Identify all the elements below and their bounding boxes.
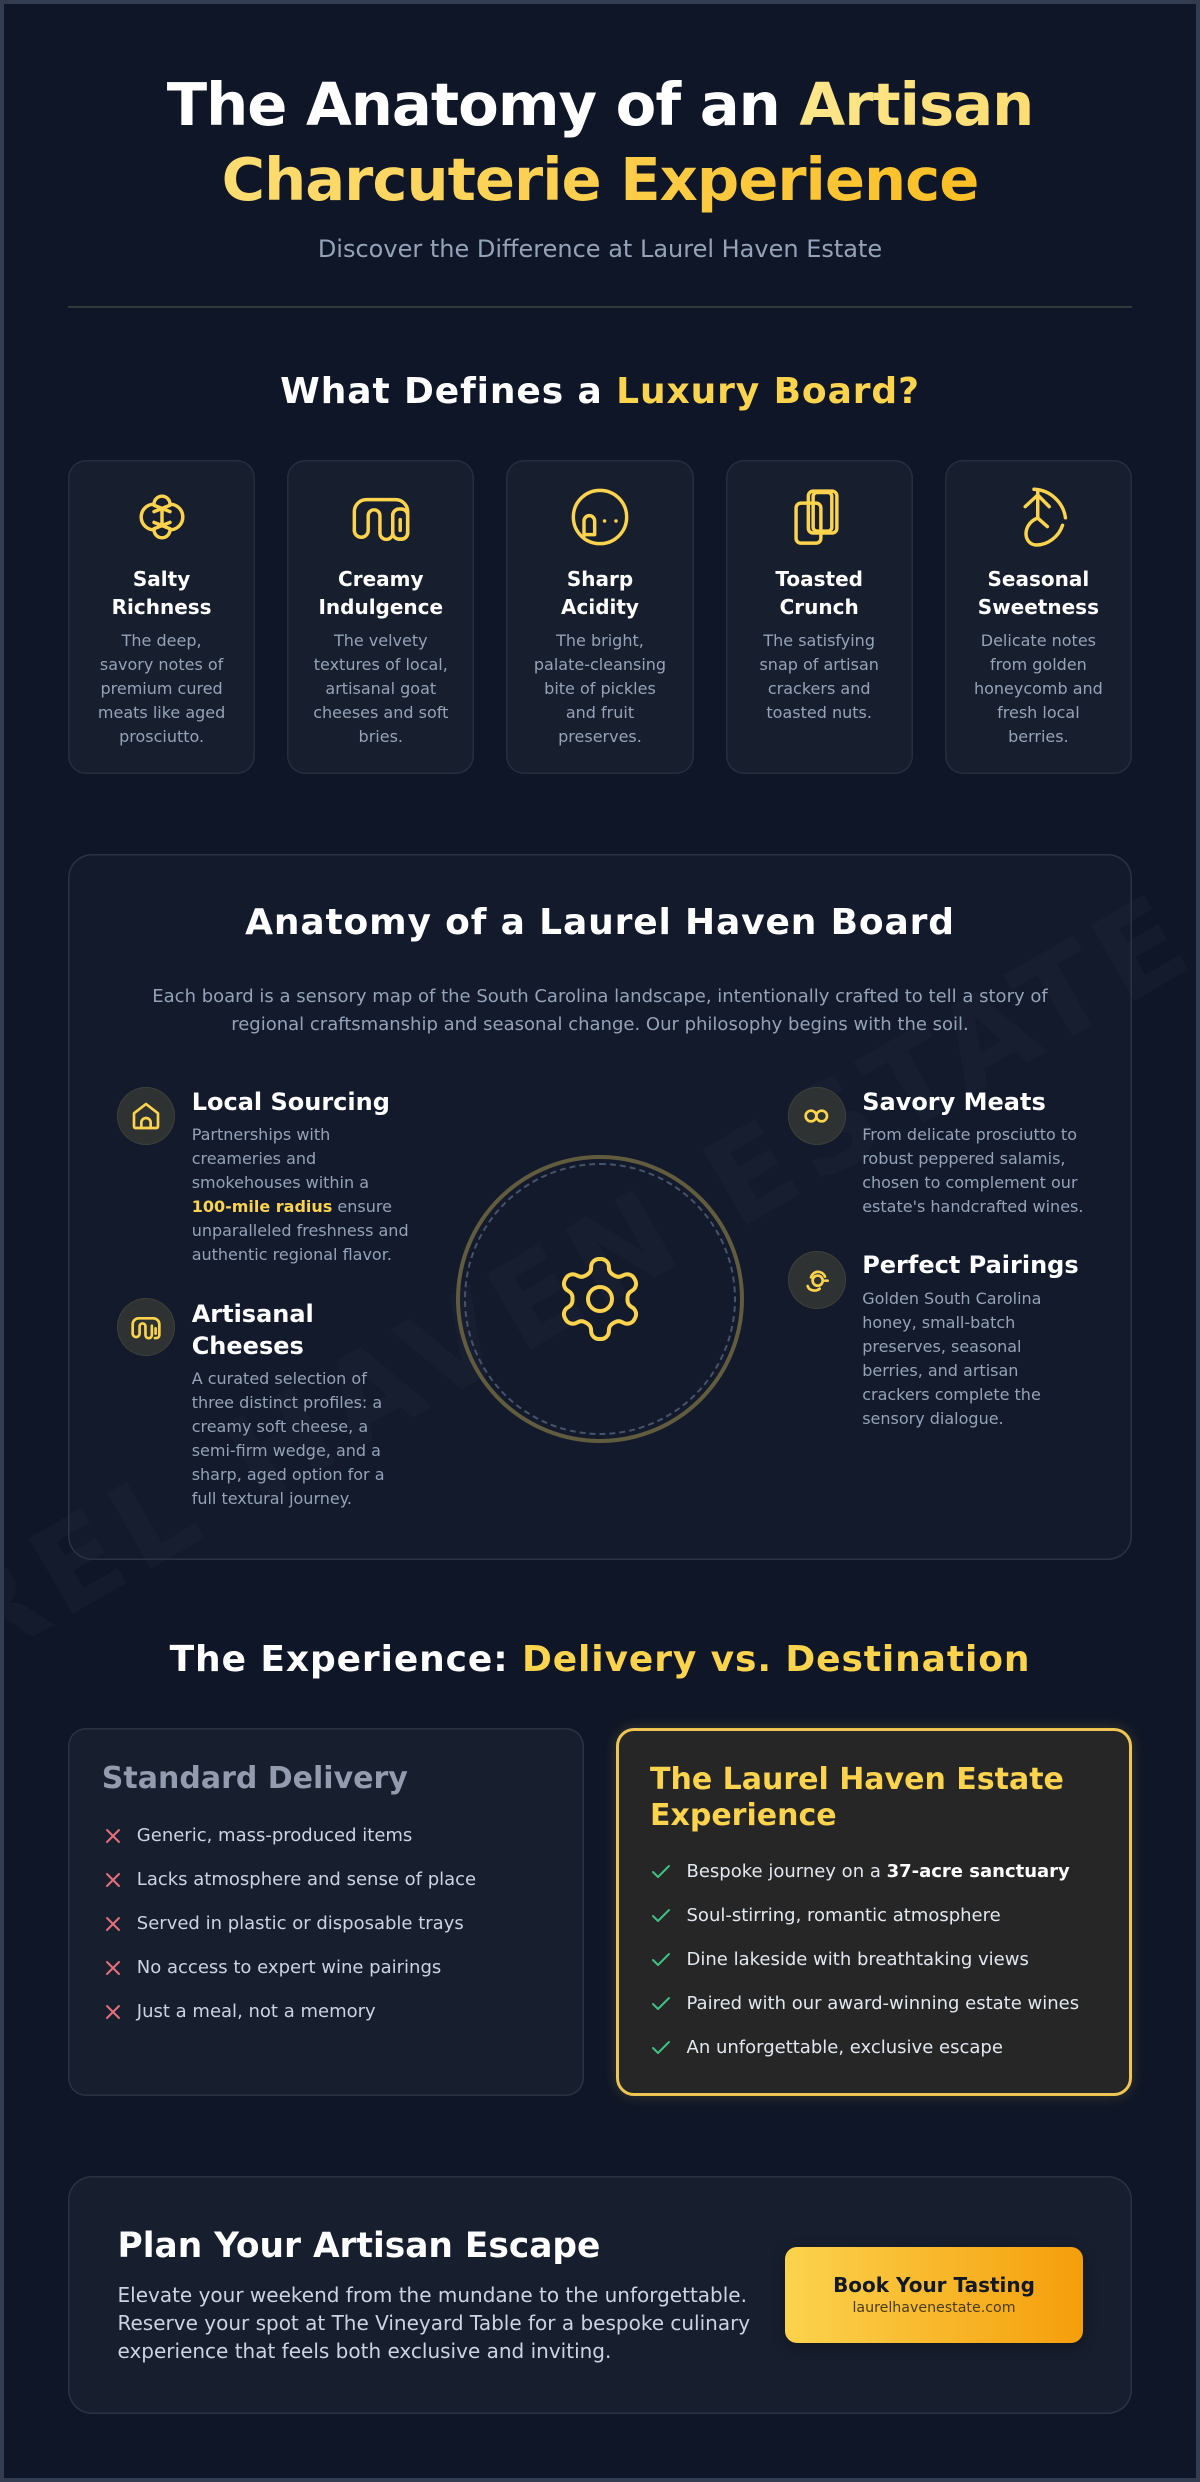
card: creamy indulgence: The velvety bbox=[334, 631, 428, 650]
feature: artisanal cheeses: three distinct profiles: a bbox=[192, 1393, 382, 1412]
title bbox=[167, 70, 1033, 214]
card: sharp acidity: Acidity bbox=[561, 595, 639, 619]
feature: perfect pairings bbox=[788, 1251, 1079, 1428]
heading: what defines a luxury board: What Defines a Luxury Board? bbox=[280, 371, 920, 412]
feature: local sourcing: unparalleled freshness and bbox=[192, 1221, 409, 1240]
feature: perfect pairings: crackers complete the bbox=[862, 1385, 1041, 1404]
card: creamy indulgence: artisanal goat bbox=[325, 679, 436, 698]
card: toasted crunch bbox=[726, 460, 913, 774]
feature: perfect pairings: honey, small-batch bbox=[862, 1313, 1015, 1332]
card: creamy indulgence: textures of local, bbox=[314, 655, 448, 674]
card: sharp acidity: preserves. bbox=[558, 727, 642, 746]
card: sharp acidity: Sharp bbox=[567, 567, 633, 591]
cta text: Elevate your weekend from the mundane to the unforgettable. bbox=[118, 2282, 747, 2306]
card: creamy indulgence: cheeses and soft bbox=[313, 703, 448, 722]
icon: gear bbox=[562, 1257, 638, 1341]
feature: perfect pairings: berries, and artisan bbox=[862, 1361, 1018, 1380]
icon: cheese bbox=[117, 1298, 175, 1356]
list item: Paired with our award-winning estate wines bbox=[686, 1993, 1079, 2014]
feature: savory meats: Savory Meats bbox=[862, 1088, 1046, 1116]
card: salty richness: Salty bbox=[133, 567, 190, 591]
icon: cured meat bbox=[139, 494, 184, 540]
icon: honey loop bbox=[788, 1251, 846, 1309]
feature: local sourcing: smokehouses within a bbox=[192, 1173, 369, 1192]
card: seasonal sweetness: from golden bbox=[990, 655, 1087, 674]
icon: house bbox=[117, 1087, 175, 1145]
feature: local sourcing: authentic regional flavor. bbox=[192, 1245, 392, 1264]
panel heading: Anatomy of a Laurel Haven Board bbox=[245, 902, 955, 943]
card: seasonal sweetness: fresh local bbox=[997, 703, 1080, 722]
card: sharp acidity: The bright, bbox=[556, 631, 644, 650]
icon: crackers bbox=[794, 489, 839, 545]
panel: the laurel haven estate experience bbox=[616, 1728, 1132, 2096]
list item: No access to expert wine pairings bbox=[137, 1956, 441, 1978]
title: The Anatomy of an Artisan bbox=[167, 70, 1033, 139]
card: seasonal sweetness: honeycomb and bbox=[974, 679, 1103, 698]
card: sharp acidity: and fruit bbox=[566, 703, 634, 722]
panel: anatomy of a laurel haven board bbox=[68, 854, 1132, 1560]
feature: savory meats: robust peppered salamis, bbox=[862, 1149, 1066, 1168]
list item: Generic, mass-produced items bbox=[137, 1824, 412, 1846]
card: creamy indulgence: Indulgence bbox=[318, 595, 443, 619]
card: toasted crunch: toasted nuts. bbox=[766, 703, 872, 722]
card: seasonal sweetness: Sweetness bbox=[978, 595, 1099, 619]
feature: artisanal cheeses: Cheeses bbox=[192, 1332, 304, 1360]
card: seasonal sweetness: Delicate notes bbox=[981, 631, 1096, 650]
intro text: regional craftsmanship and seasonal change. Our philosophy begins with the soil. bbox=[231, 1014, 969, 1035]
card: salty richness: premium cured bbox=[100, 679, 223, 698]
card: seasonal sweetness: berries. bbox=[1008, 727, 1069, 746]
feature: artisanal cheeses: creamy soft cheese, a bbox=[192, 1417, 368, 1436]
list item: Dine lakeside with breathtaking views bbox=[686, 1949, 1029, 1970]
panel: call to action bbox=[68, 2176, 1132, 2414]
list item: An unforgettable, exclusive escape bbox=[686, 2037, 1003, 2058]
feature: artisanal cheeses: sharp, aged option for a bbox=[192, 1465, 384, 1484]
card: salty richness: Richness bbox=[112, 595, 212, 619]
feature: perfect pairings: Perfect Pairings bbox=[862, 1251, 1079, 1279]
cta text: Reserve your spot at The Vineyard Table for a bespoke culinary bbox=[118, 2310, 750, 2334]
card: seasonal sweetness bbox=[945, 460, 1132, 774]
feature: perfect pairings: Golden South Carolina bbox=[862, 1289, 1041, 1308]
feature: savory meats: estate's handcrafted wines. bbox=[862, 1197, 1083, 1216]
feature: local sourcing: creameries and bbox=[192, 1149, 316, 1168]
icon: sprout leaf bbox=[1023, 488, 1068, 547]
card: salty richness: meats like aged bbox=[98, 703, 225, 722]
card: toasted crunch: snap of artisan bbox=[759, 655, 879, 674]
icon: cheese bbox=[352, 498, 410, 542]
panel heading: The Laurel Haven Estate bbox=[650, 1762, 1064, 1797]
feature: artisanal cheeses: semi-firm wedge, and a bbox=[192, 1441, 381, 1460]
list item: Bespoke journey on a 37-acre sanctuary bbox=[686, 1861, 1070, 1882]
feature: local sourcing: Partnerships with bbox=[192, 1125, 330, 1144]
cta text: experience that feels both exclusive and inviting. bbox=[118, 2338, 611, 2362]
list item: Lacks atmosphere and sense of place bbox=[137, 1868, 476, 1890]
list item: Soul-stirring, romantic atmosphere bbox=[686, 1905, 1001, 1926]
feature: local sourcing bbox=[117, 1087, 409, 1264]
feature: artisanal cheeses: Artisanal bbox=[192, 1300, 314, 1328]
list item: Served in plastic or disposable trays bbox=[137, 1912, 464, 1934]
feature: artisanal cheeses bbox=[117, 1298, 384, 1508]
panel heading: Experience bbox=[650, 1798, 837, 1833]
panel heading bbox=[650, 1762, 1064, 1833]
card: salty richness: savory notes of bbox=[100, 655, 223, 674]
dashed inner ring bbox=[464, 1163, 736, 1435]
list item: Just a meal, not a memory bbox=[137, 2000, 376, 2022]
intro text: Each board is a sensory map of the South Carolina landscape, intentionally crafted to tell a story of bbox=[152, 986, 1048, 1006]
card: toasted crunch: The satisfying bbox=[763, 631, 875, 650]
card: salty richness: prosciutto. bbox=[119, 727, 204, 746]
heading: the experience: The Experience: Delivery vs. Destination bbox=[170, 1639, 1030, 1680]
feature: perfect pairings: sensory dialogue. bbox=[862, 1409, 1004, 1428]
feature: local sourcing: 100-mile radius ensure bbox=[192, 1197, 392, 1216]
card: creamy indulgence: bries. bbox=[359, 727, 403, 746]
feature: artisanal cheeses: A curated selection of bbox=[192, 1369, 367, 1388]
cta text bbox=[118, 2282, 750, 2362]
card: sharp acidity bbox=[506, 460, 694, 774]
intro text bbox=[152, 986, 1048, 1035]
title: Charcuterie Experience bbox=[222, 145, 978, 214]
card: toasted crunch: Crunch bbox=[780, 595, 859, 619]
card: creamy indulgence: Creamy bbox=[338, 567, 424, 591]
card: sharp acidity: palate-cleansing bbox=[534, 655, 666, 674]
card: toasted crunch: Toasted bbox=[775, 567, 863, 591]
card: seasonal sweetness: Seasonal bbox=[988, 567, 1089, 591]
feature: perfect pairings: preserves, seasonal bbox=[862, 1337, 1022, 1356]
button: Book Your Tasting bbox=[833, 2273, 1035, 2297]
button bbox=[785, 2247, 1083, 2343]
card: creamy indulgence bbox=[287, 460, 474, 774]
subtitle: Discover the Difference at Laurel Haven Estate bbox=[318, 235, 882, 263]
central board circle bbox=[456, 1155, 744, 1443]
button: laurelhavenestate.com bbox=[852, 2300, 1016, 2316]
feature: artisanal cheeses: full textural journey. bbox=[192, 1489, 352, 1508]
panel heading: Standard Delivery bbox=[102, 1761, 408, 1796]
feature: savory meats: From delicate prosciutto to bbox=[862, 1125, 1077, 1144]
card: salty richness bbox=[68, 460, 255, 774]
icon: pickle circle bbox=[572, 488, 628, 546]
feature: savory meats bbox=[788, 1087, 1083, 1216]
feature: local sourcing: Local Sourcing bbox=[192, 1088, 390, 1116]
card: salty richness: The deep, bbox=[122, 631, 202, 650]
panel: standard delivery bbox=[68, 1728, 584, 2096]
card: sharp acidity: bite of pickles bbox=[544, 679, 656, 698]
icon: linked circles bbox=[788, 1087, 846, 1145]
card: toasted crunch: crackers and bbox=[768, 679, 870, 698]
feature: savory meats: chosen to complement our bbox=[862, 1173, 1078, 1192]
cta heading: Plan Your Artisan Escape bbox=[118, 2226, 600, 2266]
